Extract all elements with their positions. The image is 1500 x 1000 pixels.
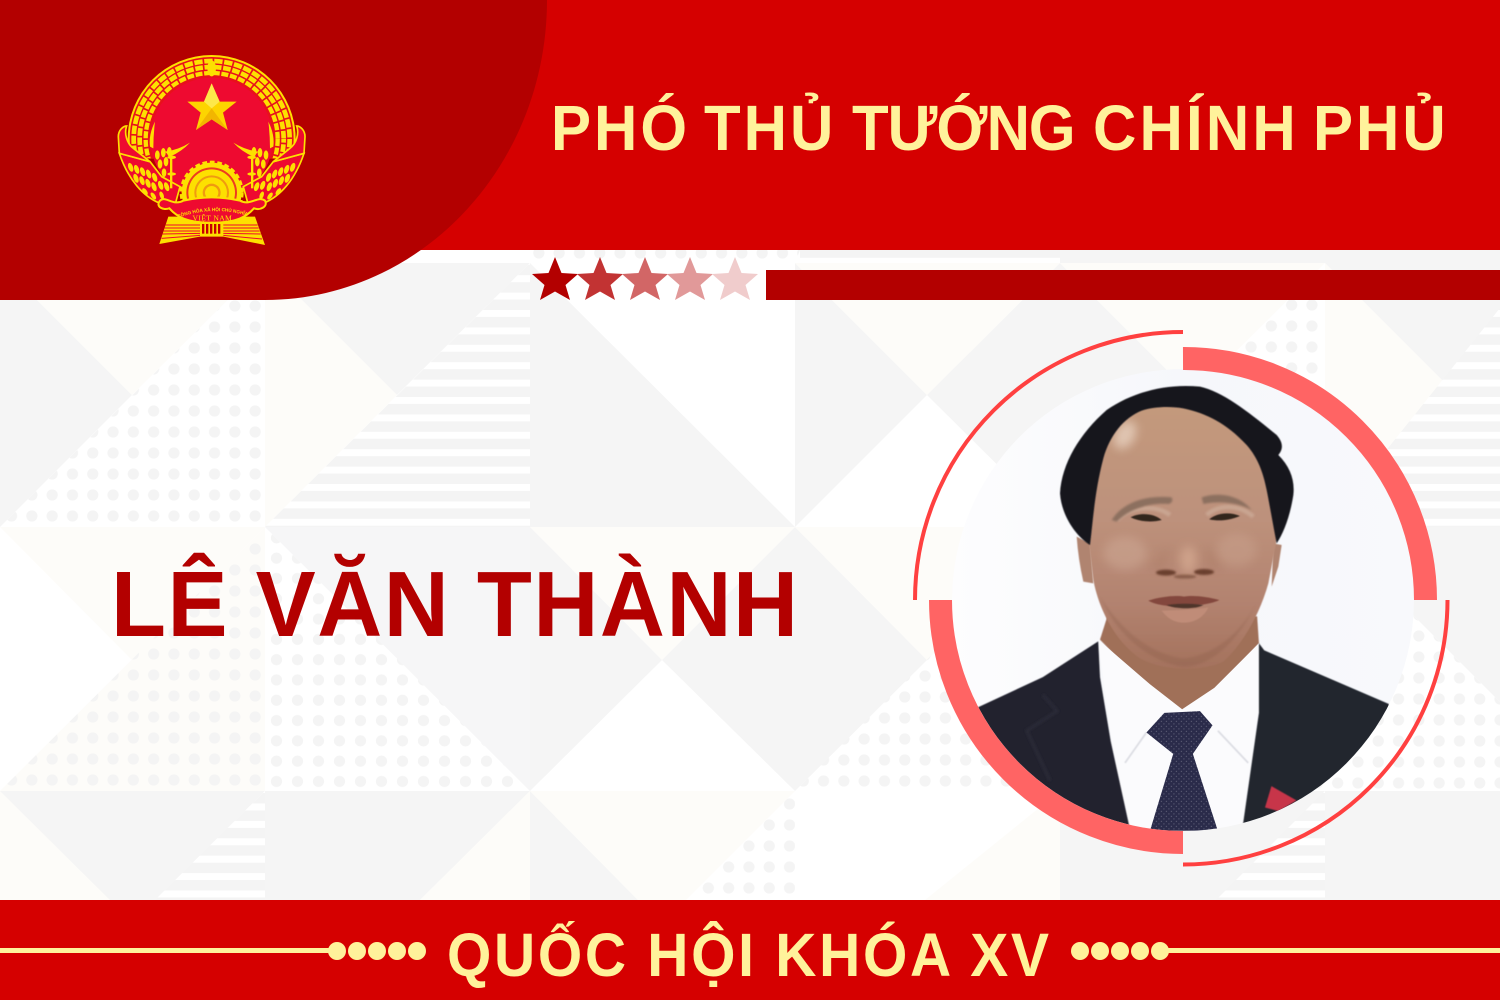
shirt [1102,643,1259,712]
emblem inner red disc [150,78,273,200]
emblem banner with text: VIỆT NAM [192,213,232,223]
under-brow light [1117,507,1253,520]
emblem wheat ring [128,55,296,158]
icon: national emblem of Vietnam [118,55,306,245]
emblem banner with text [157,196,267,223]
title: TƯỚNG [852,92,1075,164]
footer right ornament [1071,942,1500,960]
lapel shadows [1027,698,1057,733]
neck [1100,616,1260,710]
header accent bar [766,270,1500,300]
emblem left ribbon and rice [118,122,190,205]
ring: thin bottom-right arc [1183,600,1448,864]
header dark rounded panel [0,0,547,300]
title: PHÓ [551,92,690,164]
portrait with ring arcs [915,332,1448,864]
emblem gear [182,163,242,223]
title: CHÍNH [1093,92,1299,164]
forehead highlight [1110,418,1140,452]
hair [1060,386,1294,545]
title: THỦ [704,91,836,164]
emblem right ribbon and rice [233,122,305,205]
eyebrows [1112,497,1172,522]
cheek highlights [1103,537,1147,570]
head [1060,386,1294,669]
eyes [1131,514,1162,521]
mouth [1148,596,1219,623]
name heading: LÊ VĂN THÀNH [111,553,798,656]
footer left ornament [0,942,426,960]
jacket left [978,641,1130,824]
emblem base [159,217,265,245]
ring: thick top-right arc [1183,358,1426,600]
nostrils [1156,569,1214,579]
portrait photo [960,372,1390,831]
collar shading [1125,731,1248,763]
nose sides shadow [1157,550,1216,570]
tie [1146,711,1218,831]
ring: thin top-left arc [915,332,1183,600]
jacket right [1242,643,1390,823]
header band [0,0,1500,250]
jaw shadow [1109,612,1236,665]
title: PHỦ [1313,91,1449,164]
ring: thick bottom-left arc [940,600,1183,843]
nose bridge highlight [1180,546,1196,574]
footer text: QUỐC HỘI KHÓA XV [447,920,1049,989]
emblem banner with text: CÔNG HÒA XÃ HỘI CHỦ NGHĨA [178,206,248,216]
rating stars [532,257,758,300]
footer band [0,900,1500,1000]
emblem star [187,83,237,130]
face [1087,398,1280,669]
party pin [1265,786,1296,811]
ears [1077,537,1282,587]
